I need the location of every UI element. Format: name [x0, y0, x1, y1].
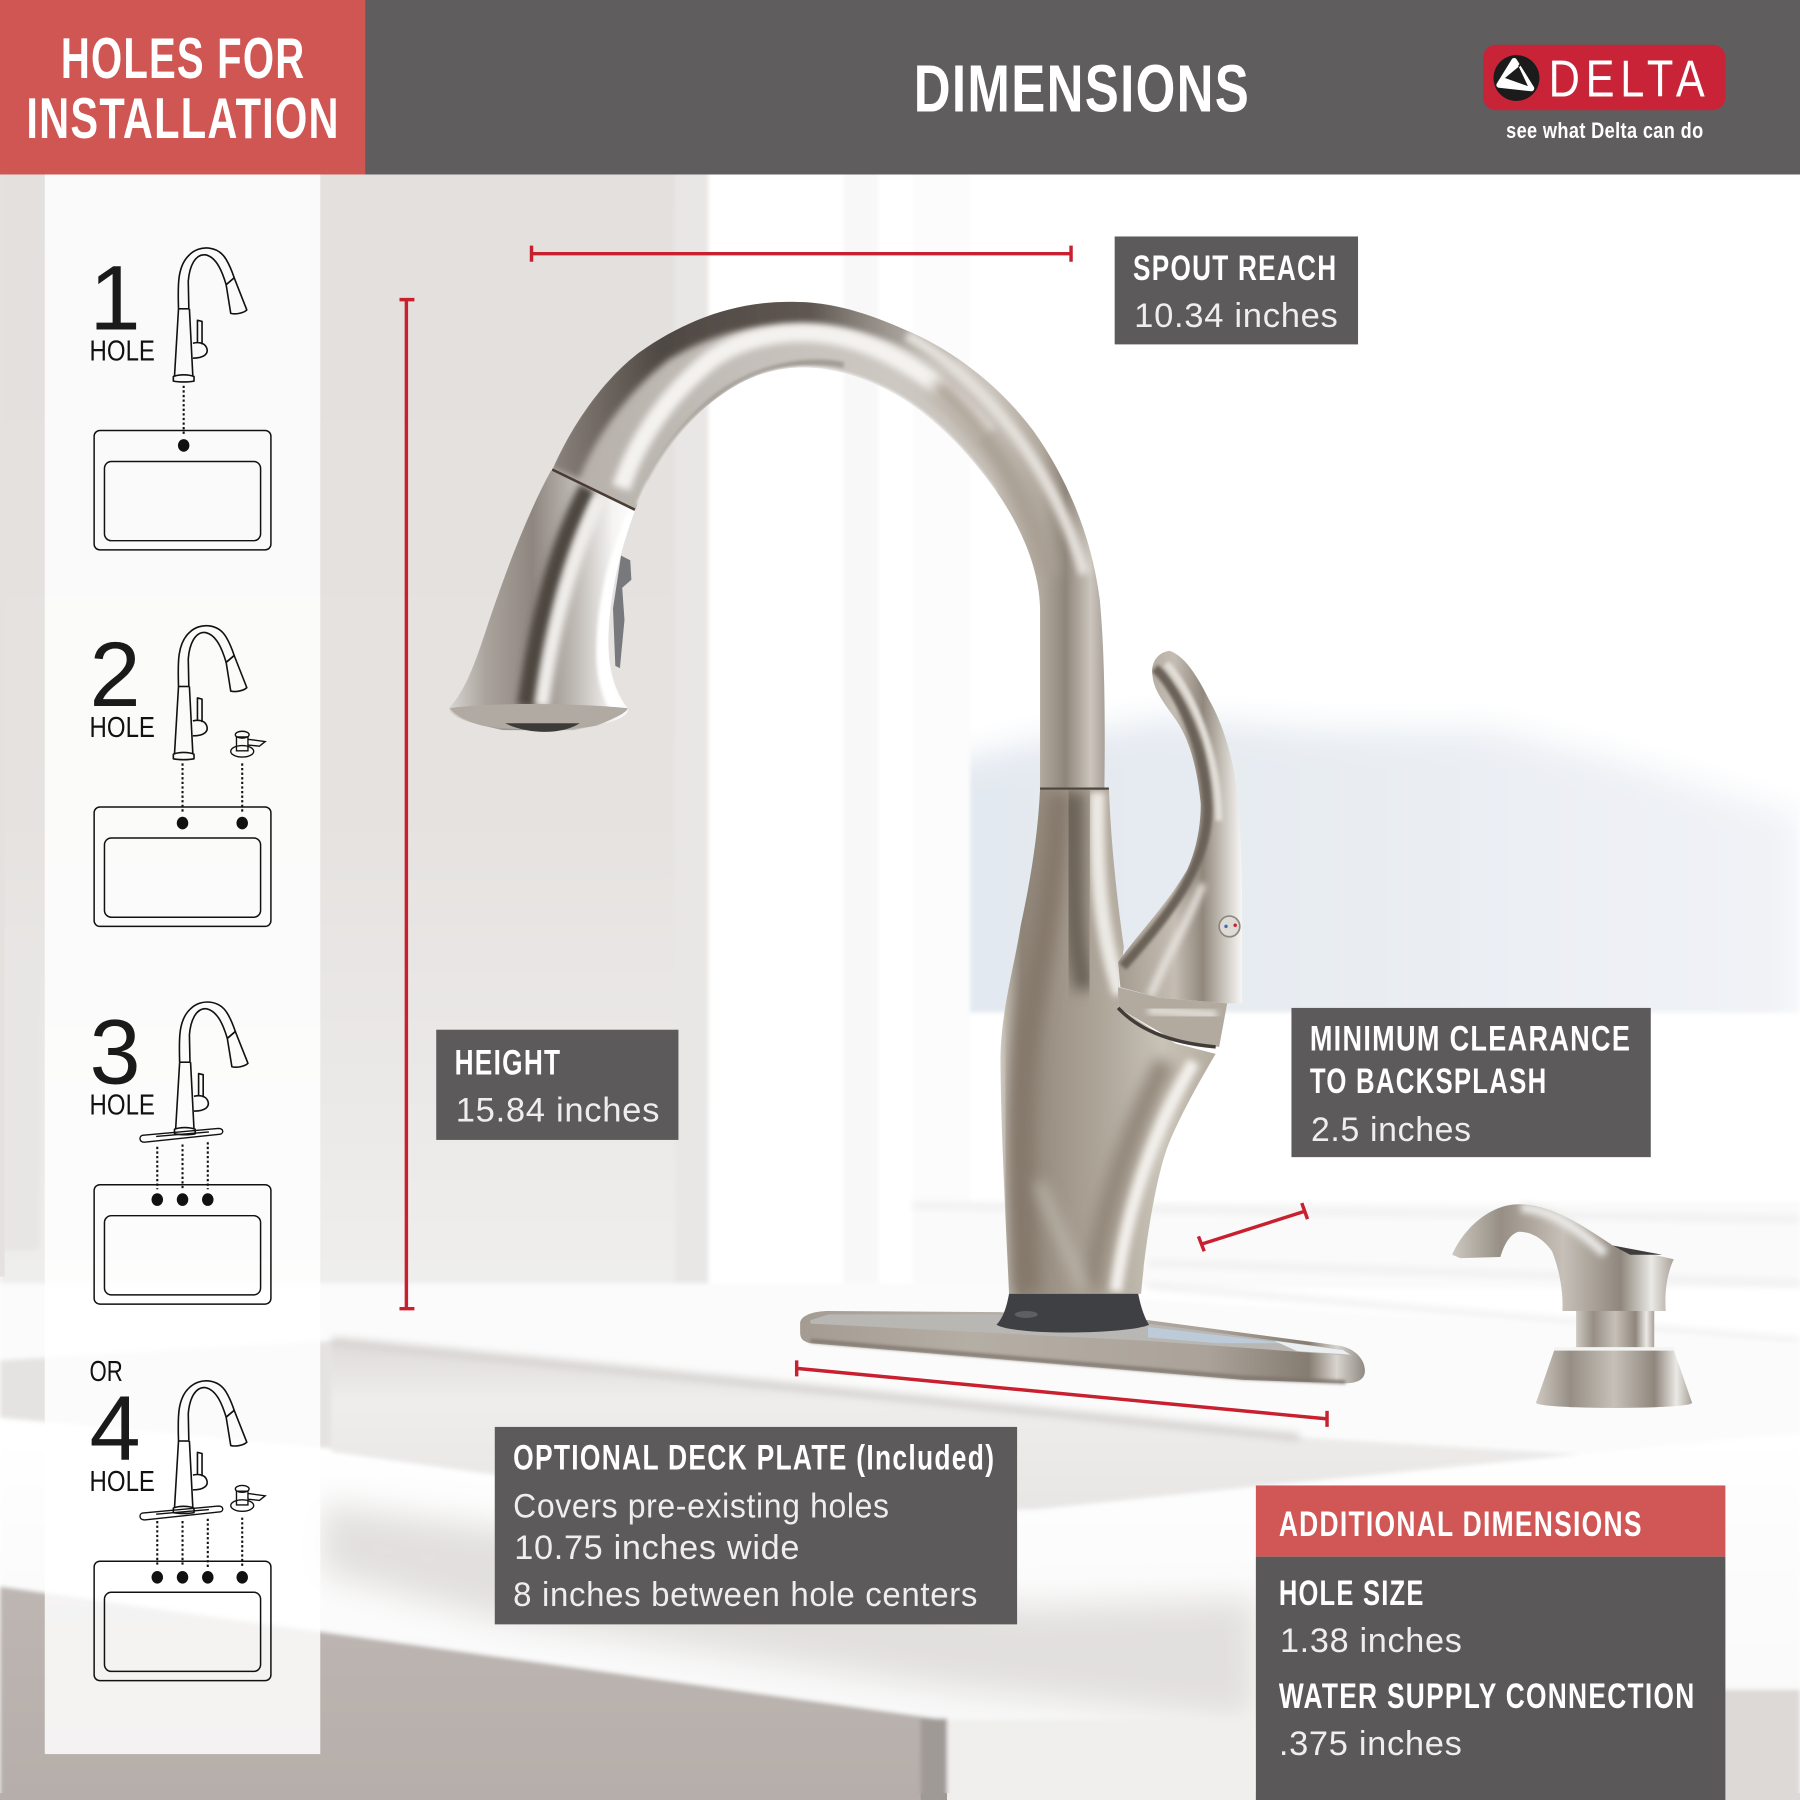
4 hole option: OR: [90, 1356, 123, 1388]
callout: height: HEIGHT: [455, 1042, 561, 1082]
header panel: holes for installation: HOLES FOR: [61, 27, 305, 91]
callout: height: 15.84 inches: [456, 1092, 660, 1130]
1 hole option: HOLE: [90, 335, 155, 367]
dimension line: minimum clearance: [1198, 1203, 1308, 1251]
panel: additional dimensions: HOLE SIZE: [1279, 1573, 1425, 1613]
1 hole option: [90, 247, 271, 550]
dimension line: height: [399, 300, 414, 1309]
2 hole option: 2: [90, 624, 141, 726]
callout: spout reach: [1115, 236, 1358, 344]
dimension line: deck plate width: [797, 1360, 1327, 1427]
handle: [1118, 651, 1242, 1047]
callout: height: [436, 1030, 678, 1140]
4 hole option: 4: [90, 1378, 141, 1480]
header panel: holes for installation: INSTALLATION: [26, 87, 340, 151]
spout tube: [551, 302, 1109, 790]
callout: minimum clearance: MINIMUM CLEARANCE: [1310, 1018, 1631, 1058]
callout: minimum clearance: TO BACKSPLASH: [1310, 1061, 1547, 1101]
panel: additional dimensions: [1256, 1485, 1725, 1800]
3 hole option: HOLE: [90, 1090, 155, 1122]
callout: optional deck plate: 10.75 inches wide: [514, 1529, 800, 1567]
callout: optional deck plate: OPTIONAL DECK PLATE (Included): [513, 1437, 995, 1477]
soap dispenser: [1452, 1204, 1692, 1408]
header panel: holes for installation: [0, 0, 365, 174]
1 hole option: 1: [90, 247, 141, 349]
callout: optional deck plate: [495, 1427, 1017, 1624]
header bar: [0, 0, 1800, 174]
callout: minimum clearance: 2.5 inches: [1311, 1111, 1472, 1149]
4 hole option: [90, 1356, 271, 1681]
3 hole option: 3: [90, 1002, 141, 1104]
Delta logo: [1483, 45, 1725, 143]
panel: additional dimensions: .375 inches: [1279, 1725, 1462, 1763]
panel: additional dimensions: 1.38 inches: [1280, 1622, 1463, 1660]
sidebar panel: holes for installation: [45, 174, 320, 1754]
faucet lower body: [1000, 790, 1216, 1294]
2 hole option: HOLE: [90, 712, 155, 744]
callout: optional deck plate: Covers pre-existing holes: [513, 1488, 890, 1526]
Delta logo: see what Delta can do: [1506, 118, 1704, 143]
heading: dimensions: DIMENSIONS: [914, 52, 1250, 126]
dimension line: spout reach: [532, 246, 1071, 262]
callout: spout reach: SPOUT REACH: [1133, 248, 1337, 288]
callout: optional deck plate: 8 inches between hole centers: [513, 1576, 978, 1614]
base ring: [996, 1294, 1149, 1333]
faucet deck plate: [800, 1311, 1365, 1383]
2 hole option: [90, 624, 271, 926]
3 hole option: [90, 1002, 271, 1304]
callout: minimum clearance: [1291, 1008, 1651, 1157]
Delta logo: DELTA: [1549, 49, 1710, 107]
4 hole option: HOLE: [90, 1466, 155, 1498]
faucet product photo illustration: [449, 302, 1365, 1383]
pull-down spray head: [449, 470, 635, 732]
callout: spout reach: 10.34 inches: [1134, 297, 1339, 335]
panel: additional dimensions: ADDITIONAL DIMENSIONS: [1279, 1504, 1643, 1544]
